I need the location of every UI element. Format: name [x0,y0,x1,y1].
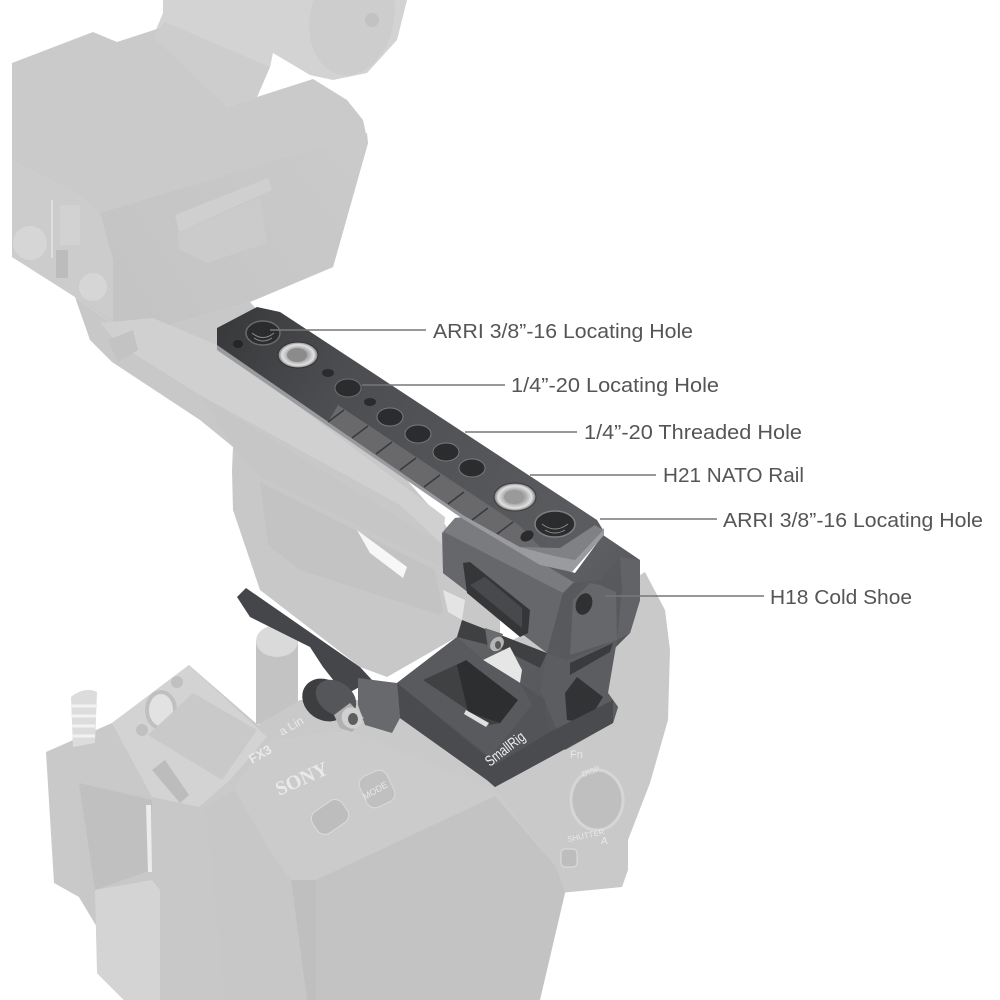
threaded hole 2 [405,425,431,443]
unit body [12,28,368,325]
body top panel [234,730,556,880]
threaded knob [71,690,97,747]
handle top face [100,318,445,545]
text: A: A [601,836,608,847]
lower clamp strip [237,588,372,695]
body corner [291,880,316,1000]
grip panel [260,482,443,615]
slit [570,643,613,675]
text: disp: DISP [581,764,601,779]
gap behind beam [443,590,465,620]
hole: 1/4-20 locating [335,379,361,397]
screw front [494,483,536,511]
beam top strip [442,517,575,593]
window inner light [470,577,522,628]
shoe hole [147,692,175,728]
cage silhouette [397,517,640,787]
base block [397,637,550,787]
rail side band [328,405,545,552]
threaded hole 1 [377,408,403,426]
grip block [95,880,160,1000]
cold shoe hole [573,591,595,617]
front pin hole [518,528,536,544]
text: mode: MODE [361,780,389,802]
beam window [463,562,530,637]
base window inner [457,660,518,723]
small clamp block [358,678,400,733]
side controls panel [12,160,113,320]
camera handle (ghosted) [75,297,500,677]
callout: 1/4-20 threaded hole: 1/4”-20 Threaded Hole [584,422,802,444]
top handle tube [153,0,407,107]
arch opening [483,647,522,683]
top plate side edge [217,345,604,572]
rear pin hole [233,340,243,348]
left cage [79,783,225,1000]
end side plate [617,557,640,640]
switch [308,796,352,838]
lower leg window [565,677,603,723]
callouts [270,321,983,609]
rear screw [485,628,507,654]
hole: ARRI locating front [535,511,575,537]
model text: FX3 [246,742,274,767]
bar side face [200,395,443,567]
under-beam dark strip [457,620,547,668]
left body strip [205,790,307,1000]
rail serrations [328,410,513,534]
unit front face [100,133,368,325]
neck and bar [75,297,500,677]
beam front face [443,532,563,653]
hole: ARRI locating rear [246,321,280,345]
handle lock lever [108,330,138,362]
callout: ARRI 3/8-16 locating hole top: ARRI 3/8”-16 Locating Hole [433,321,693,343]
text: shutter: SHUTTER [567,827,606,844]
clamp knob [294,670,367,733]
rail clamp [153,22,270,107]
base window [423,663,518,725]
text: line: a Lin [276,713,306,739]
brand logo: SmallRig [482,728,529,770]
base front face [397,683,613,787]
base light edge [464,710,489,727]
cold shoe recess [570,583,617,655]
base top face [397,637,532,757]
callout: H18 cold shoe: H18 Cold Shoe [770,587,912,609]
end face [547,557,640,660]
threaded hole 3 [433,443,459,461]
text: fn: Fn [570,749,583,761]
cold shoe mount [112,665,267,807]
white slot [146,805,152,872]
small hole 1 [322,369,334,377]
callout: 1/4-20 locating hole: 1/4”-20 Locating Hole [511,375,719,397]
camera screen [316,796,565,1000]
far end chamfer [520,525,603,560]
callout: ARRI 3/8-16 locating hole bottom: ARRI 3/8”-16 Locating Hole [723,510,983,532]
camera top unit (ghosted) [12,0,407,325]
recess [177,197,267,263]
white gap [357,530,407,578]
screw rear [278,342,318,368]
small mount holes [136,676,183,736]
brand text: SONY [272,758,332,801]
side pin [175,178,272,232]
camera body (ghosted) [46,572,670,1000]
SmallRig top handle [217,307,640,787]
small hole 2 [364,398,376,406]
threaded hole 4 [459,459,485,477]
callout: H21 NATO rail: H21 NATO Rail [663,465,804,487]
shoe recess [148,693,257,780]
body silhouette [46,572,670,1000]
left cage gap [79,783,152,890]
slot [152,760,189,803]
button: mode [356,767,398,811]
playback button [561,849,577,867]
rig post [256,625,298,725]
dial [571,770,623,830]
lower leg [540,640,618,750]
top plate surface [217,307,603,560]
